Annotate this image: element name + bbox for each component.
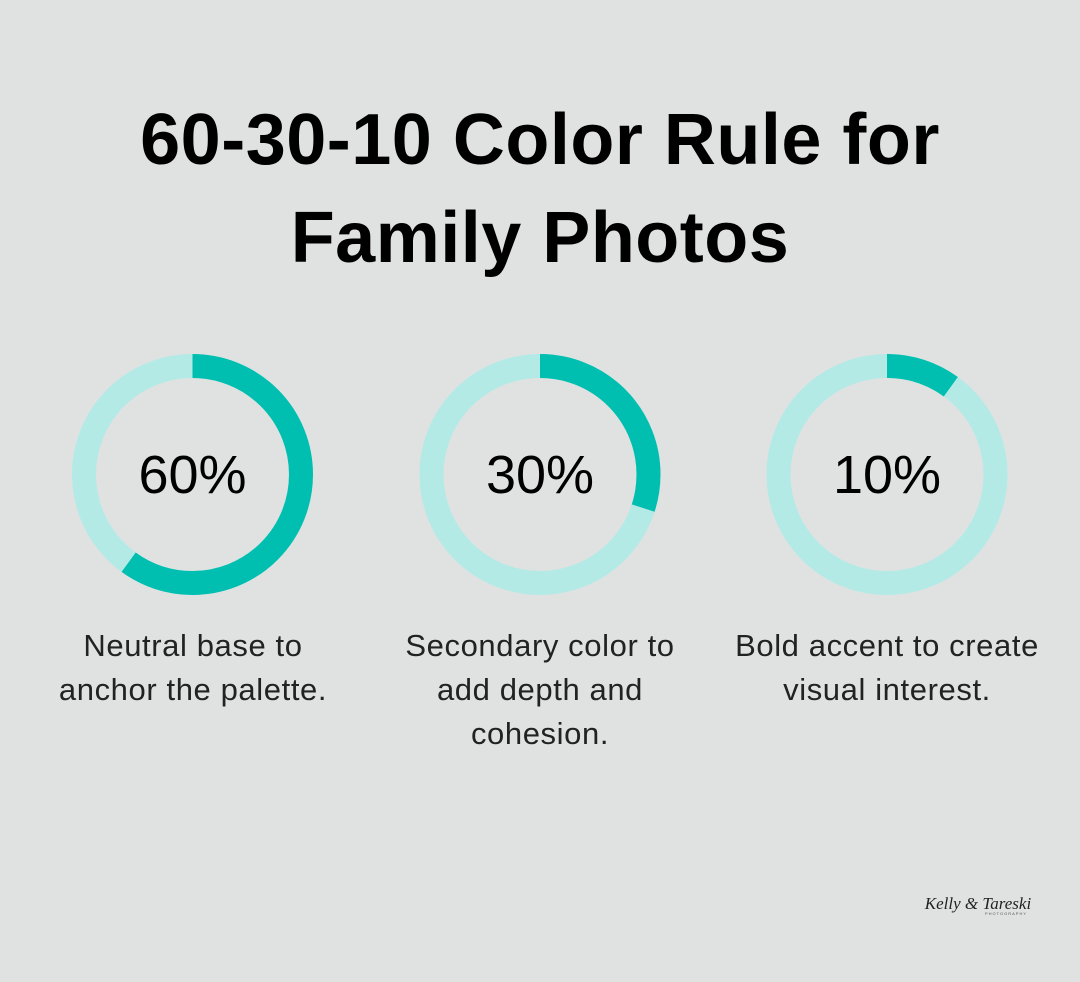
logo signature: PHOTOGRAPHY xyxy=(985,911,1027,916)
label: 30%: add depth and xyxy=(437,672,643,707)
label: 30% xyxy=(405,628,675,751)
donut: 30% xyxy=(432,366,648,583)
label: 10%: visual interest. xyxy=(783,672,991,707)
donut: 60%: 60% xyxy=(138,445,247,505)
label: 60% xyxy=(59,628,327,707)
donut: 10%: 10% xyxy=(833,445,941,505)
label: 30%: Secondary color to xyxy=(405,628,675,663)
label: 30%: cohesion. xyxy=(471,716,609,751)
title: 60-30-10 Color Rule for xyxy=(140,100,940,180)
title xyxy=(140,100,940,278)
label: 60%: Neutral base to xyxy=(83,628,303,663)
title: Family Photos xyxy=(291,198,789,278)
label: 10% xyxy=(735,628,1039,707)
logo signature: Kelly & Tareski xyxy=(924,894,1031,913)
label: 10%: Bold accent to create xyxy=(735,628,1039,663)
label: 60%: anchor the palette. xyxy=(59,672,327,707)
donut: 30%: 30% xyxy=(486,445,594,505)
donut: 10% xyxy=(778,366,996,583)
donut: 60% xyxy=(84,366,301,583)
